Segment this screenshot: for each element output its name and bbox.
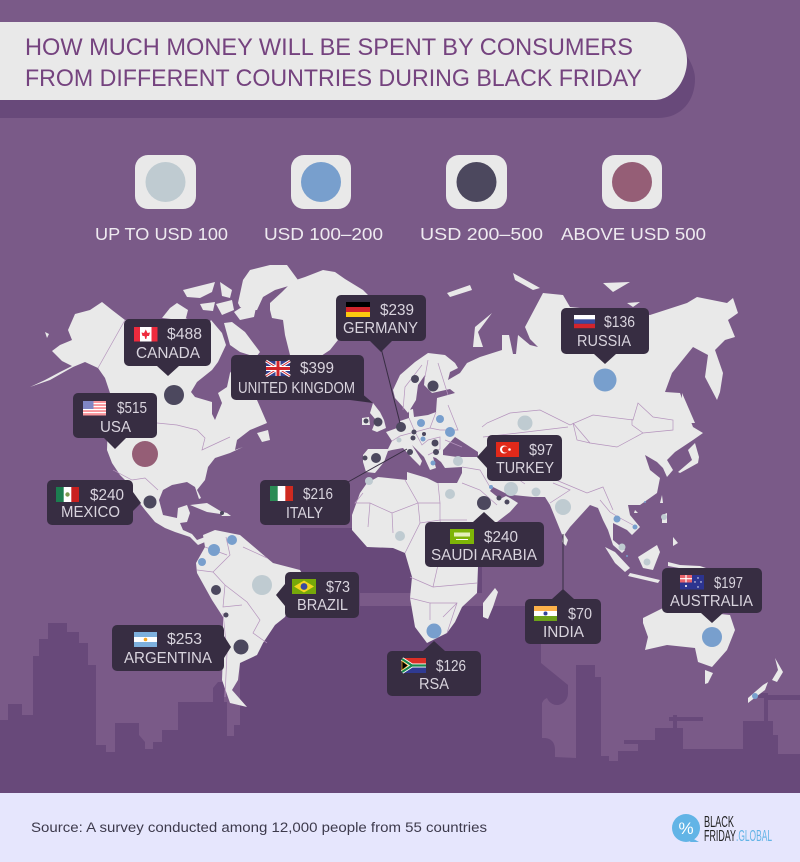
callout: argentina [112,625,231,671]
callout: brazil: BRAZIL [297,597,348,614]
leader line: italy [348,449,407,482]
callout: canada: $488 [167,326,202,343]
legend item: above usd 500 [561,155,706,244]
callout: turkey [477,435,562,481]
flag: united kingdom [266,361,290,376]
land: africa [352,472,498,643]
legend item: up to usd 100: UP TO USD 100 [95,224,228,244]
source note: Source: A survey conducted among 12,000 people from 55 countries [31,820,487,835]
flag: turkey [496,442,519,457]
flag: italy [270,486,293,501]
callout: canada: CANADA [136,345,201,362]
logo: black friday global: FRIDAY [704,828,736,845]
flag: south africa [402,658,426,673]
callout: united kingdom: $399 [300,360,334,377]
heading: HOW MUCH MONEY WILL BE SPENT BY CONSUMERS [25,34,633,61]
callout: russia: $136 [604,314,635,331]
callout: germany: $239 [380,302,414,319]
flag: saudi arabia [450,529,474,544]
land: south america [196,530,303,707]
callout: russia [561,308,649,364]
title banner [0,22,695,118]
callout: usa: $515 [117,400,147,417]
flag: brazil [292,579,316,594]
callout: argentina: $253 [167,631,202,648]
bubbles: spending per country [132,368,758,699]
callout: india: INDIA [543,624,585,641]
heading [25,34,642,92]
callout: australia: AUSTRALIA [670,593,754,610]
world map [30,265,783,707]
callout: turkey: $97 [529,442,553,459]
callout: india [525,534,601,644]
legend item: usd 200-500: USD 200–500 [420,224,543,244]
country borders [98,320,673,697]
north america bubbles [132,385,224,515]
callout: saudi arabia [425,512,544,567]
callout: italy: $216 [303,486,333,503]
callout: mexico: MEXICO [61,504,120,521]
flag: canada [134,327,158,342]
legend item: up to usd 100 [95,155,228,244]
south america bubbles [198,535,272,654]
flag: russia [574,315,595,328]
callout: germany: GERMANY [343,320,418,337]
callout: south africa [387,641,481,696]
callout: south africa: $126 [436,658,466,675]
flag: mexico [56,487,79,502]
city skyline silhouette [0,528,800,793]
callout: brazil [276,572,359,618]
callout: south africa: RSA [419,676,450,693]
legend item: usd 100-200: USD 100–200 [264,224,383,244]
heading: FROM DIFFERENT COUNTRIES DURING BLACK FRIDAY [25,65,642,92]
legend [95,155,706,244]
callout: australia: $197 [714,575,743,592]
callout: united kingdom [231,355,373,403]
flag: argentina [134,632,157,647]
logo: black friday global: % [678,819,694,838]
callout: russia: RUSSIA [577,333,632,350]
callout: united kingdom: UNITED KINGDOM [238,380,355,397]
footer band [0,793,800,862]
flag: australia [680,575,704,590]
leader line: germany [381,348,400,423]
callout: india: $70 [568,606,592,623]
callout: usa: USA [100,419,132,436]
europe bubbles [362,375,455,466]
logo: black friday global [672,814,772,845]
legend item: usd 200-500 [420,155,543,244]
flag: india [534,606,557,621]
callout: brazil: $73 [326,579,350,596]
callout: germany [336,295,426,423]
land: north america [30,265,298,545]
callout: argentina: ARGENTINA [124,650,213,667]
callout: canada [124,319,211,376]
leader line: india [562,534,564,592]
legend item: usd 100-200 [264,155,383,244]
land: greenland [270,270,368,366]
land: australia and new zealand [643,608,783,703]
africa and oceania bubbles [365,477,758,699]
callout: mexico [47,480,141,525]
callout: australia [662,568,762,623]
callout: mexico: $240 [90,487,124,504]
black sea [443,437,478,457]
callout: saudi arabia: SAUDI ARABIA [431,547,538,564]
callout: saudi arabia: $240 [484,529,518,546]
land: eurasia [362,273,738,583]
flag: usa [83,401,106,416]
callout: italy: ITALY [286,505,323,522]
callout: italy [260,449,407,525]
callout: usa [73,393,157,449]
flag: germany [346,302,370,317]
legend item: above usd 500: ABOVE USD 500 [561,224,706,244]
asia bubbles [453,368,667,566]
callout: turkey: TURKEY [496,460,554,477]
logo: black friday global: BLACK [704,814,734,831]
